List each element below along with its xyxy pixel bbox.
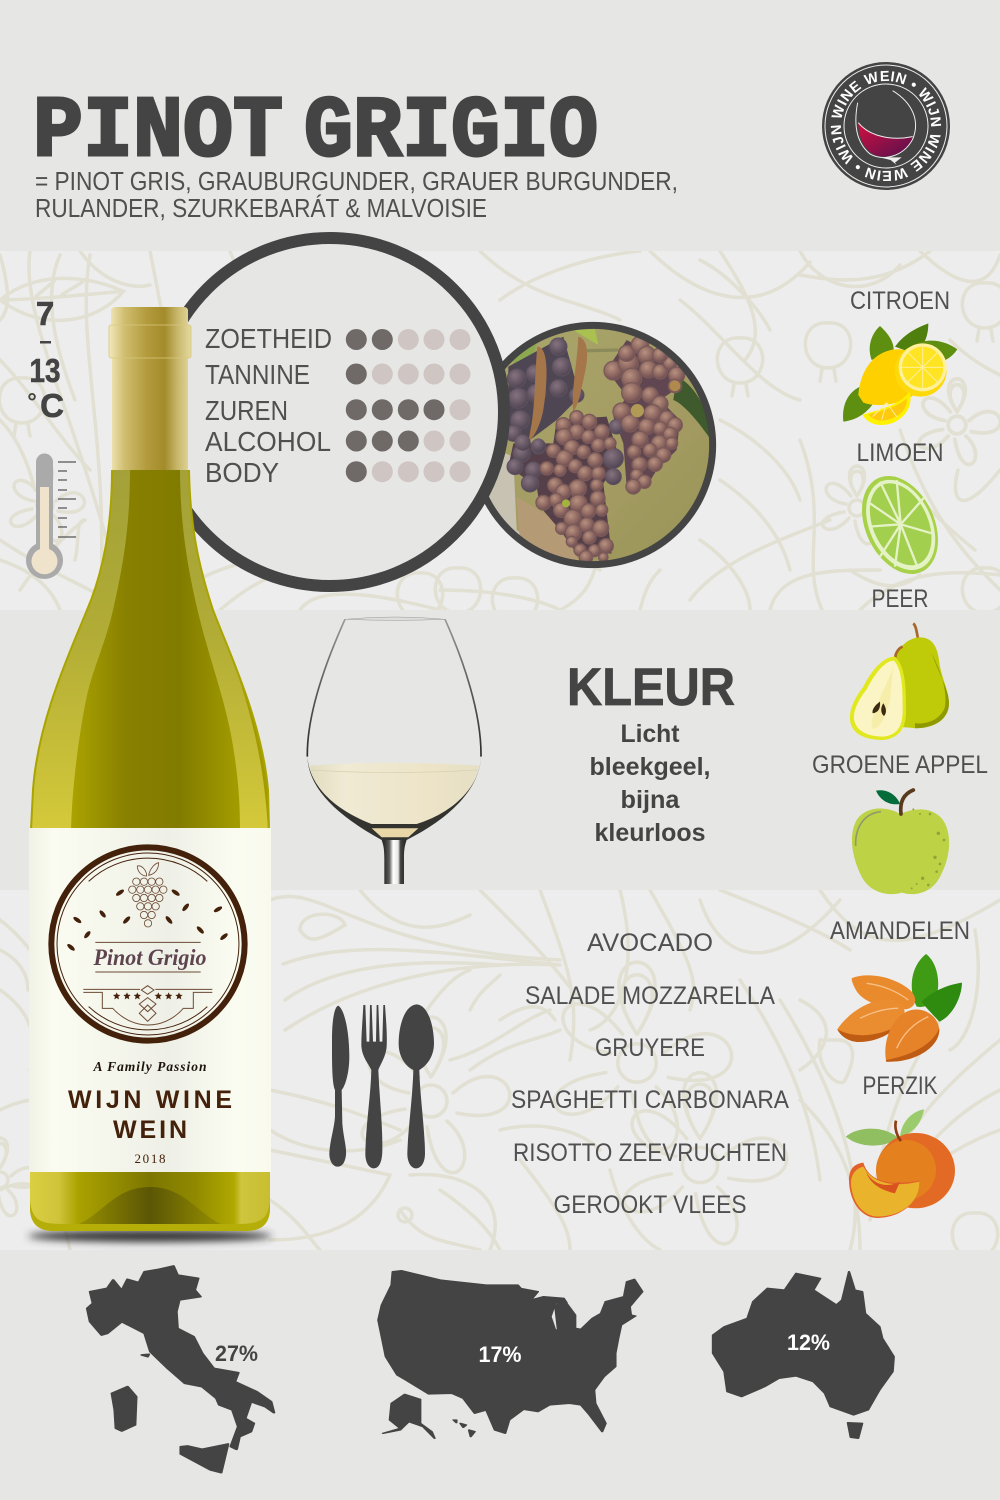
icon: pear: [850, 623, 949, 740]
ratings: zuren: ZUREN: [205, 395, 288, 426]
temperature range: [27, 295, 64, 424]
ratings: tannine: [205, 359, 470, 390]
ratings: zoetheid: [205, 323, 470, 354]
icon: wine wein logo: WINE WEIN • WIJN WINE WEIN • WIJN: [830, 70, 942, 181]
icon: lemon: [843, 323, 957, 425]
subtitle: synonyms: = PINOT GRIS, GRAUBURGUNDER, GRAUER BURGUNDER,: [35, 166, 678, 196]
temperature range: 13: [30, 352, 60, 389]
bottle label emblem: [51, 847, 245, 1041]
food pairings list: RISOTTO ZEEVRUCHTEN: [513, 1139, 787, 1167]
map: italy: 27%: [215, 1341, 258, 1366]
temperature range: °: [27, 389, 37, 416]
ratings: tannine: TANNINE: [205, 359, 310, 390]
icon: lime: [847, 464, 953, 586]
aroma labels: PERZIK: [862, 1072, 938, 1100]
ratings: body: BODY: [205, 457, 279, 488]
title: [33, 83, 598, 181]
food pairings list: GEROOKT VLEES: [554, 1191, 746, 1219]
icon: cutlery: [329, 1004, 434, 1168]
map: united states: [378, 1271, 642, 1438]
icon: thermometer: [26, 454, 76, 579]
colour description: bijna: [620, 786, 681, 814]
aroma labels: [812, 287, 988, 1100]
photo: pinot grigio grapes: [473, 323, 713, 570]
subtitle: synonyms: [35, 166, 678, 223]
food pairings list: AVOCADO: [587, 929, 713, 957]
panel: floral pattern bands: [0, 251, 1000, 1271]
colour description: kleurloos: [594, 819, 706, 847]
colour description: [590, 720, 710, 847]
ratings: body: [205, 457, 470, 488]
icon: almonds: [837, 954, 962, 1062]
bottle label text: A Family Passion: [92, 1059, 206, 1074]
bottle label text: 2018: [134, 1151, 166, 1166]
aroma labels: LIMOEN: [856, 439, 944, 467]
map: italy: [87, 1266, 274, 1473]
colour description: Licht: [620, 720, 680, 748]
bottle label text: WEIN: [113, 1116, 187, 1144]
aroma labels: CITROEN: [850, 287, 950, 315]
aroma labels: PEER: [872, 585, 928, 613]
wine glass: [307, 617, 481, 884]
food pairings list: SALADE MOZZARELLA: [525, 982, 775, 1010]
bottle label text: WIJN WINE: [68, 1086, 232, 1114]
food pairings list: SPAGHETTI CARBONARA: [511, 1086, 789, 1114]
ratings: zuren: [205, 395, 470, 426]
map: australia: 12%: [787, 1330, 830, 1355]
title: PINOT: [33, 83, 283, 181]
map: united states: 17%: [478, 1342, 522, 1367]
bottle label text: [68, 1059, 232, 1166]
food pairings list: [511, 929, 789, 1219]
ratings: zoetheid: ZOETHEID: [205, 323, 332, 354]
food pairings list: GRUYERE: [595, 1034, 705, 1062]
map: australia: [713, 1272, 894, 1438]
bottle label name: Pinot Grigio: [93, 945, 206, 970]
icon: green apple: [852, 790, 949, 894]
temperature range: 7: [36, 295, 54, 332]
colour description: bleekgeel,: [590, 753, 710, 781]
aroma labels: AMANDELEN: [830, 917, 970, 945]
ratings: alcohol: ALCOHOL: [205, 426, 331, 457]
ratings: alcohol: [205, 426, 470, 457]
wine bottle: [28, 307, 272, 1242]
heading: kleur: KLEUR: [567, 658, 735, 717]
title: GRIGIO: [304, 83, 598, 181]
temperature range: C: [40, 387, 64, 424]
icon: peach: [846, 1109, 955, 1218]
panel: taste profile circle: [156, 238, 504, 586]
subtitle: synonyms: RULANDER, SZURKEBARÁT & MALVOISIE: [35, 193, 487, 223]
